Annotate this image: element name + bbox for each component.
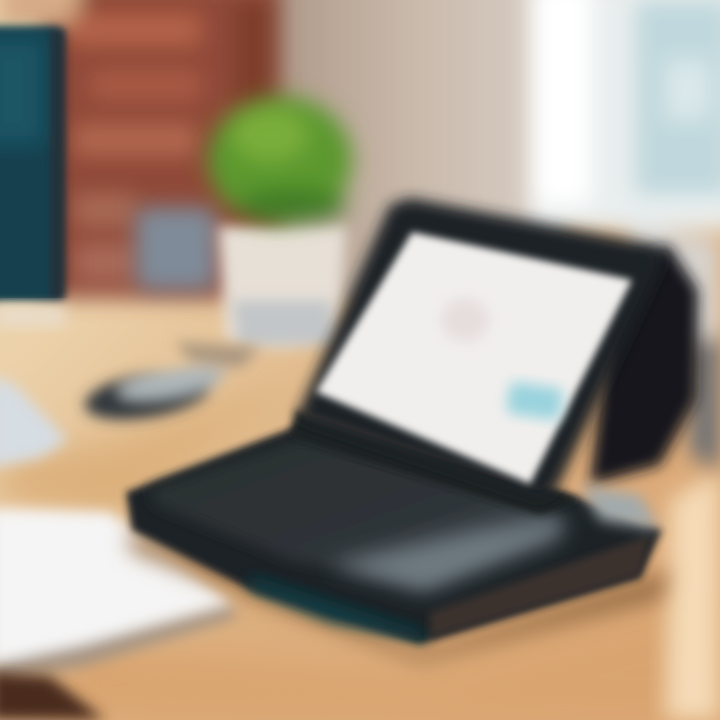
dark object, bottom left corner: [0, 672, 105, 720]
tablet frame: [296, 198, 664, 500]
tablet hinge: dark joint between screen and keyboard: [290, 410, 580, 515]
screen content tint: [441, 298, 489, 342]
background: beige wall: [260, 0, 560, 300]
keyboard surface: [150, 438, 560, 585]
white papers, bottom left: [0, 508, 236, 682]
monitor stand glare: [0, 305, 65, 327]
background: brick wall: [0, 0, 280, 298]
light palm rest: [330, 516, 568, 592]
left laptop corner: [0, 375, 68, 468]
shadow under the case: [130, 530, 670, 662]
brown right edge: [430, 535, 650, 638]
blue-gray cup: [135, 207, 217, 291]
tablet keyboard case: [126, 425, 670, 662]
mouse on the desk: [81, 342, 260, 428]
monitor on the left: [0, 26, 66, 302]
green plant: [208, 96, 352, 224]
tablet stand back flap: [590, 244, 698, 485]
hinge highlight: [580, 485, 660, 530]
case base: [126, 425, 662, 644]
tablet screen: [316, 232, 632, 484]
white plant pot: [218, 226, 346, 349]
background: bright window: [530, 0, 720, 470]
screen blue button: [506, 381, 564, 421]
teal front edge: [250, 575, 430, 642]
